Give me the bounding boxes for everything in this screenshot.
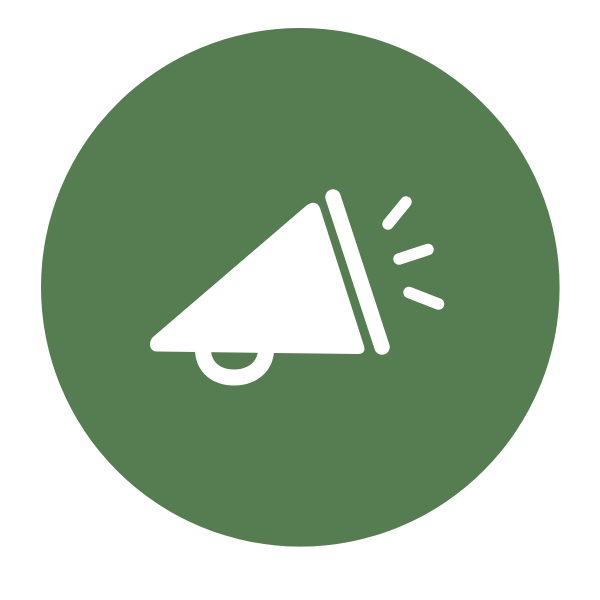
megaphone front rim bbox=[333, 197, 382, 347]
megaphone cone bbox=[150, 203, 364, 354]
megaphone handle bbox=[195, 351, 274, 386]
icon: megaphone bbox=[150, 197, 438, 386]
green circle background bbox=[41, 28, 560, 547]
sound lines bbox=[388, 202, 438, 304]
